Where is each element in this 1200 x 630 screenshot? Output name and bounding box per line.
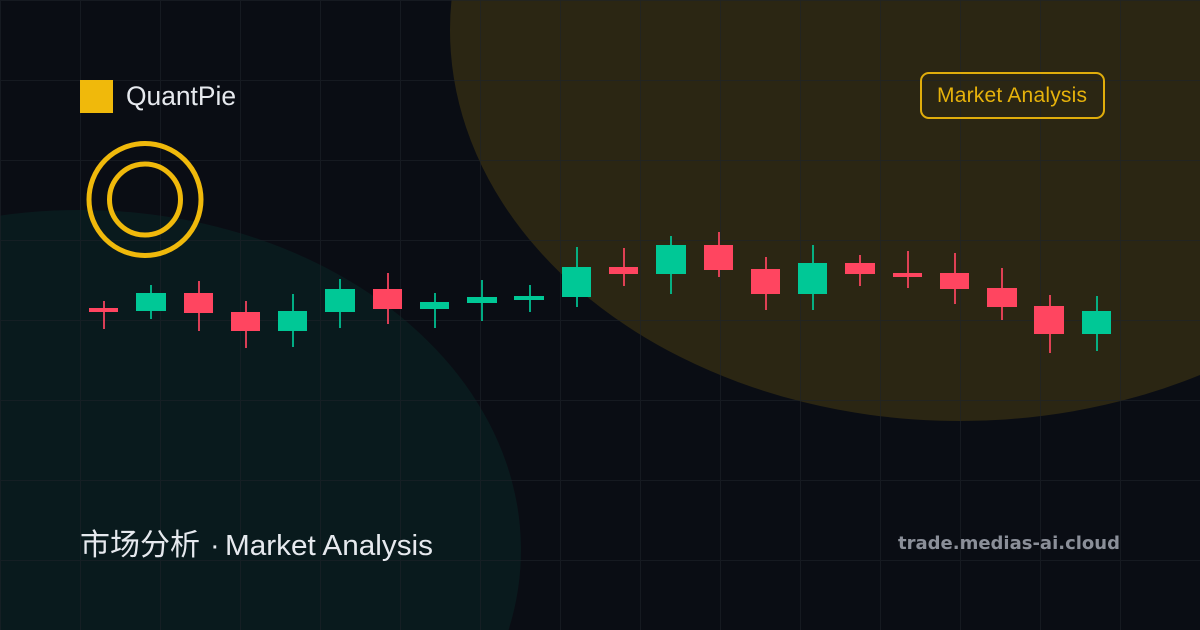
badge: Market Analysis: Market Analysis <box>937 84 1087 107</box>
title: Market Analysis <box>225 530 433 562</box>
badge: Market Analysis <box>921 73 1104 118</box>
candlestick chart <box>89 232 1111 353</box>
icon: concentric rings <box>89 144 201 256</box>
logo square icon <box>80 80 113 113</box>
background blob: teal ellipse <box>0 210 521 630</box>
title: 市场分析 <box>80 520 200 564</box>
background blob: gold ellipse <box>450 0 1200 421</box>
site url: trade.medias-ai.cloud <box>898 533 1120 554</box>
title: · <box>210 530 220 562</box>
brand name: QuantPie <box>126 81 236 111</box>
title <box>80 520 433 564</box>
